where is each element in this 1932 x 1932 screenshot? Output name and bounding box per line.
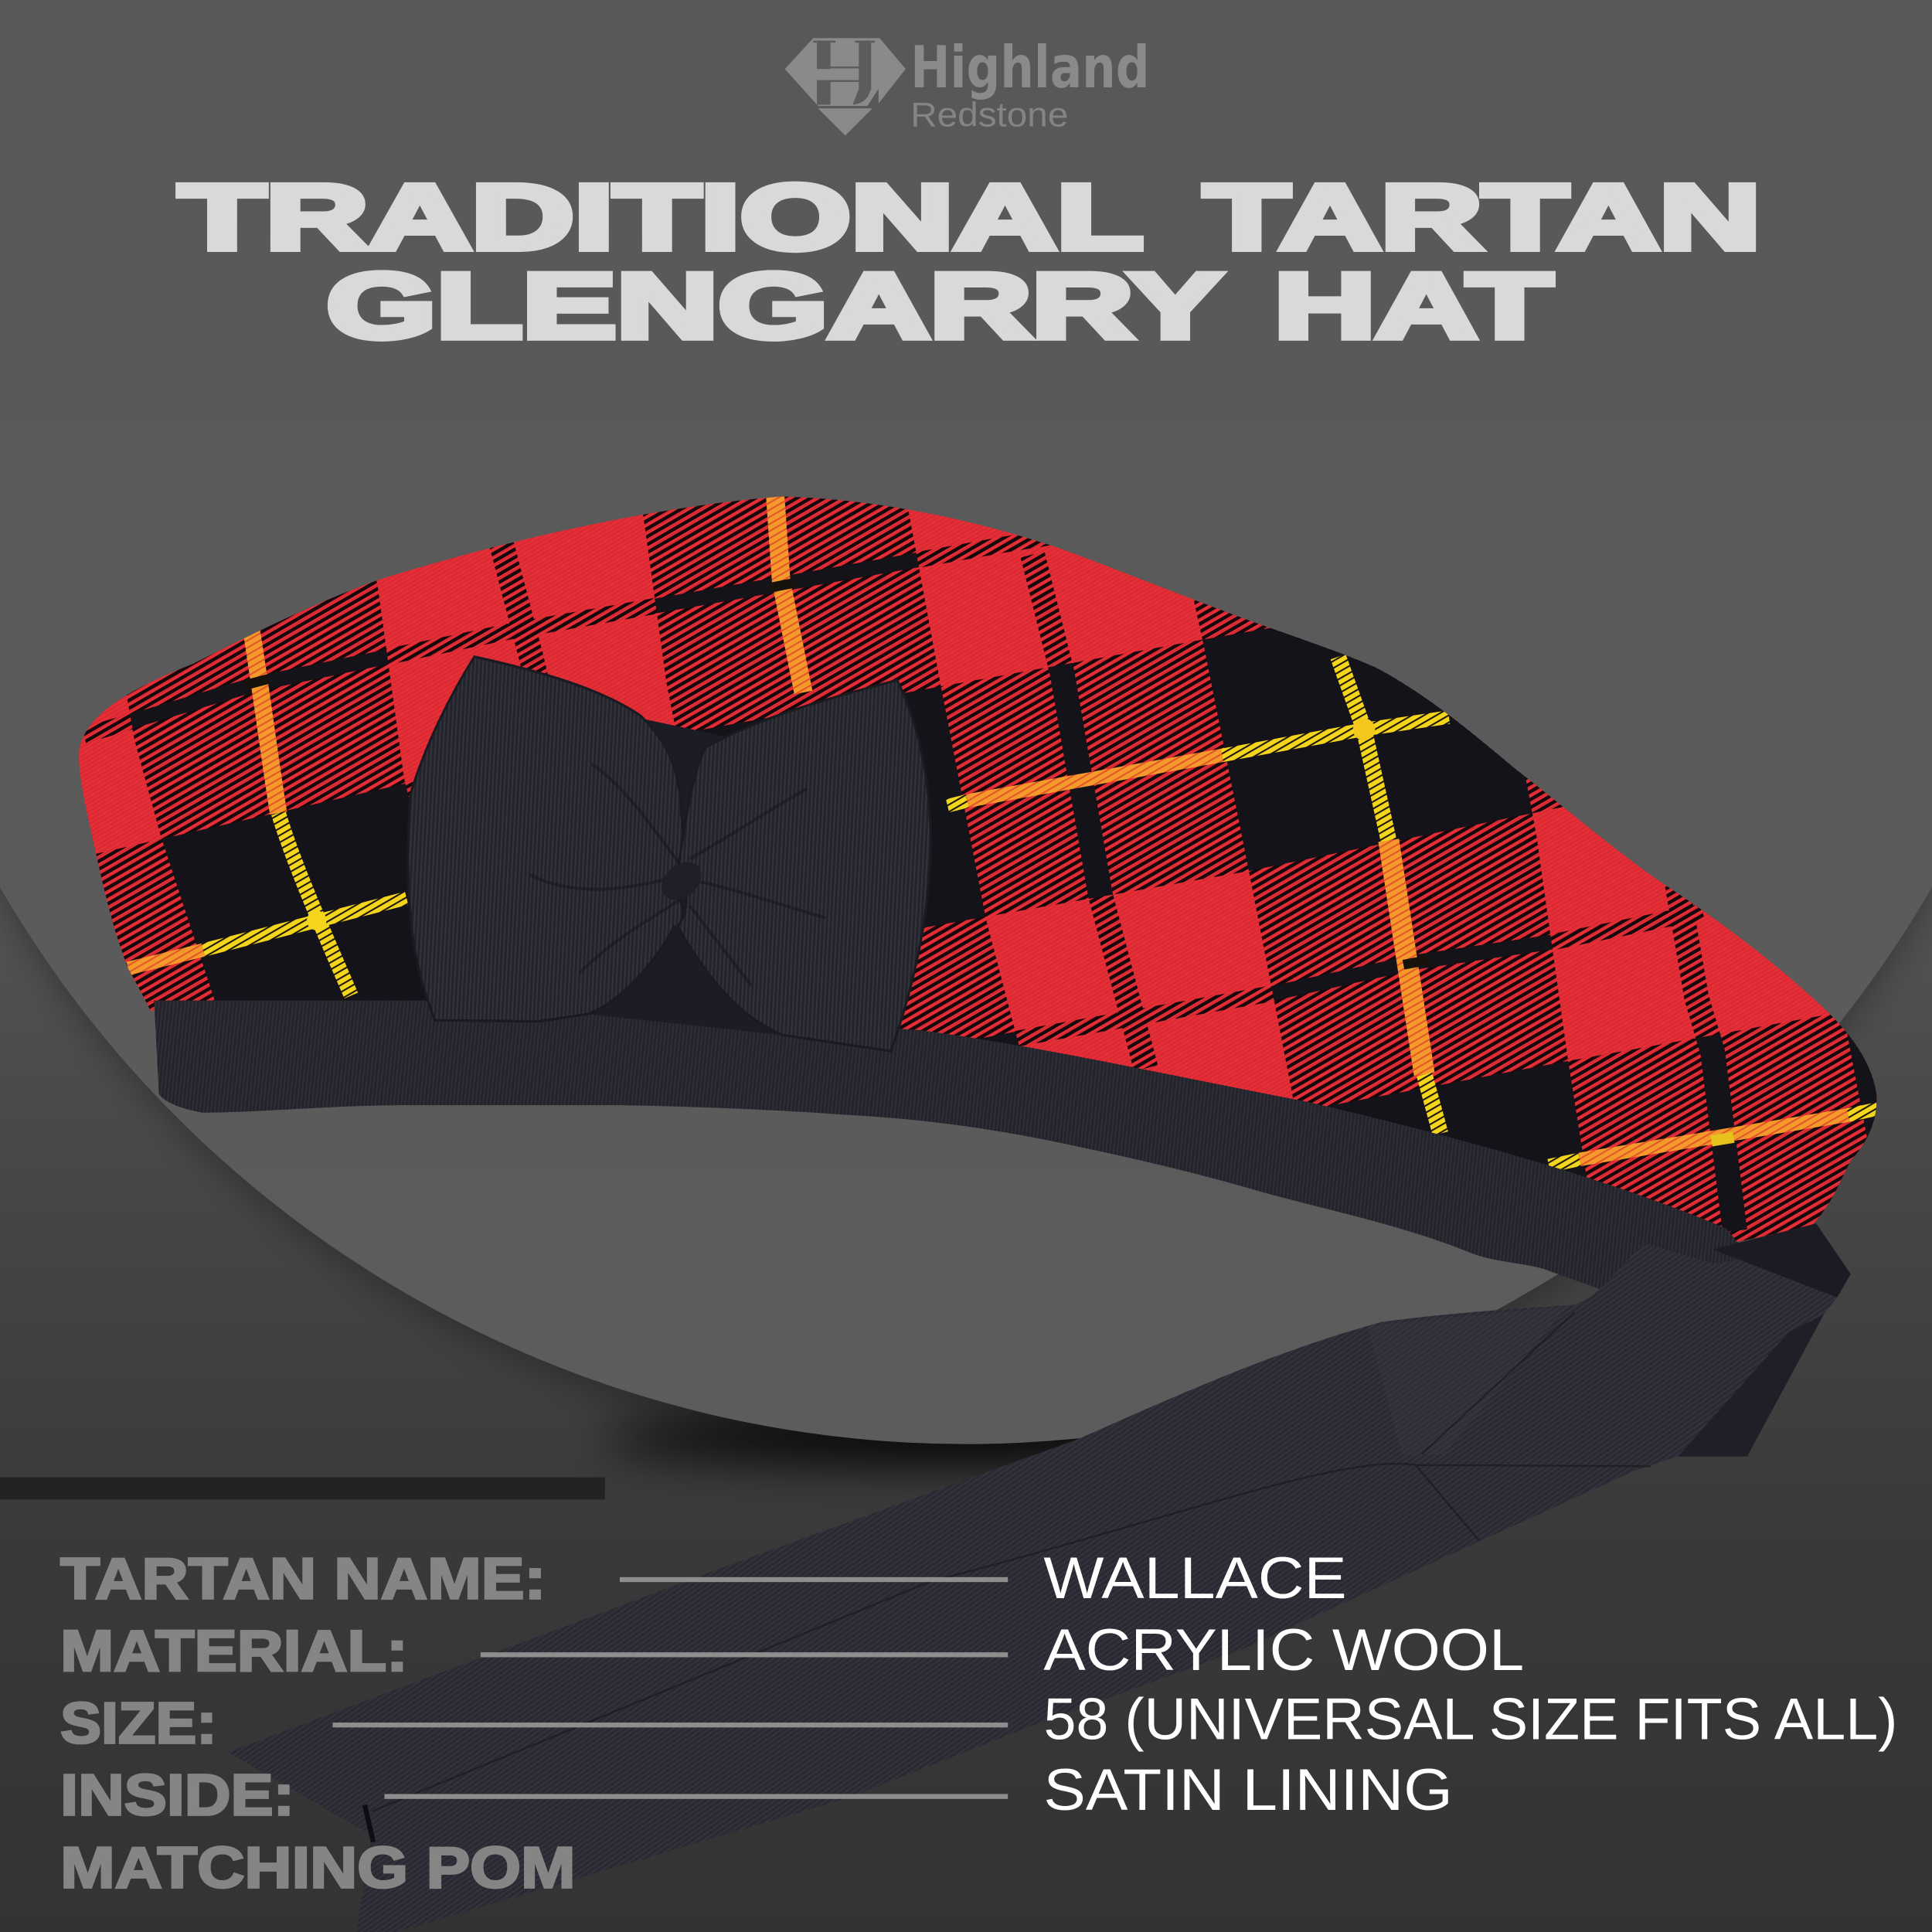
title word HAT: HAT (1274, 255, 1553, 358)
tartan wide vertical bands (127, 496, 1876, 1176)
hat ribbon tails (228, 1223, 1851, 1932)
title word GLENGARRY: GLENGARRY (327, 255, 1223, 358)
tartan thin solid lines at crossings (1048, 663, 1747, 1232)
tail light fold panel (1368, 1306, 1567, 1454)
dark accent bar (0, 1478, 605, 1499)
backdrop circle with shadow (0, 0, 1932, 1466)
glengarry hat illustration (49, 468, 1932, 1932)
value: satin lining: SATIN LINING (1043, 1757, 1453, 1823)
value: size universal: 58 (UNIVERSAL SIZE FITS ALL) (1043, 1686, 1897, 1752)
tartan black crossings (162, 628, 1876, 1178)
logo wordmark Redstone: Redstone (910, 96, 1068, 134)
tail seams (372, 1312, 1651, 1811)
ribbon knot at band end (1575, 1223, 1851, 1332)
value: wallace: WALLACE (1043, 1546, 1347, 1611)
hat ribbed band (154, 1001, 1750, 1289)
icon: diamond HJ monogram (785, 38, 906, 135)
spec values (1043, 1546, 1897, 1823)
bow knot folds (530, 764, 825, 986)
logo: Highland Redstone (785, 33, 1150, 135)
label: size: SIZE: (60, 1690, 217, 1755)
bow centre band (588, 717, 782, 1035)
ribbon bow (408, 657, 930, 1051)
logo wordmark Highland: Highland (910, 33, 1150, 101)
title word TRADITIONAL: TRADITIONAL (179, 166, 1144, 269)
label: material: MATERIAL: (60, 1618, 408, 1683)
bow right lobe (678, 680, 930, 1051)
label: tartan name: TARTAN NAME: (60, 1546, 546, 1611)
title (179, 166, 1760, 358)
tartan orange and yellow lines (128, 493, 1878, 1165)
tartan thin hatched lines (83, 530, 1735, 1231)
tartan wide horizontal bands (96, 628, 1876, 1241)
hat crown: tartan pattern (79, 496, 1876, 1242)
spec labels (60, 1546, 576, 1900)
label: inside: INSIDE: (60, 1763, 294, 1828)
leader lines (332, 1577, 1008, 1799)
title word TARTAN: TARTAN (1204, 166, 1760, 269)
tail dark back flap (1679, 1315, 1824, 1457)
value: acrylic wool: ACRYLIC WOOL (1043, 1617, 1524, 1683)
label: matching pom: MATCHING POM (60, 1835, 576, 1900)
tartan line crossing knots (245, 583, 1733, 1141)
bow left lobe (408, 657, 685, 1022)
